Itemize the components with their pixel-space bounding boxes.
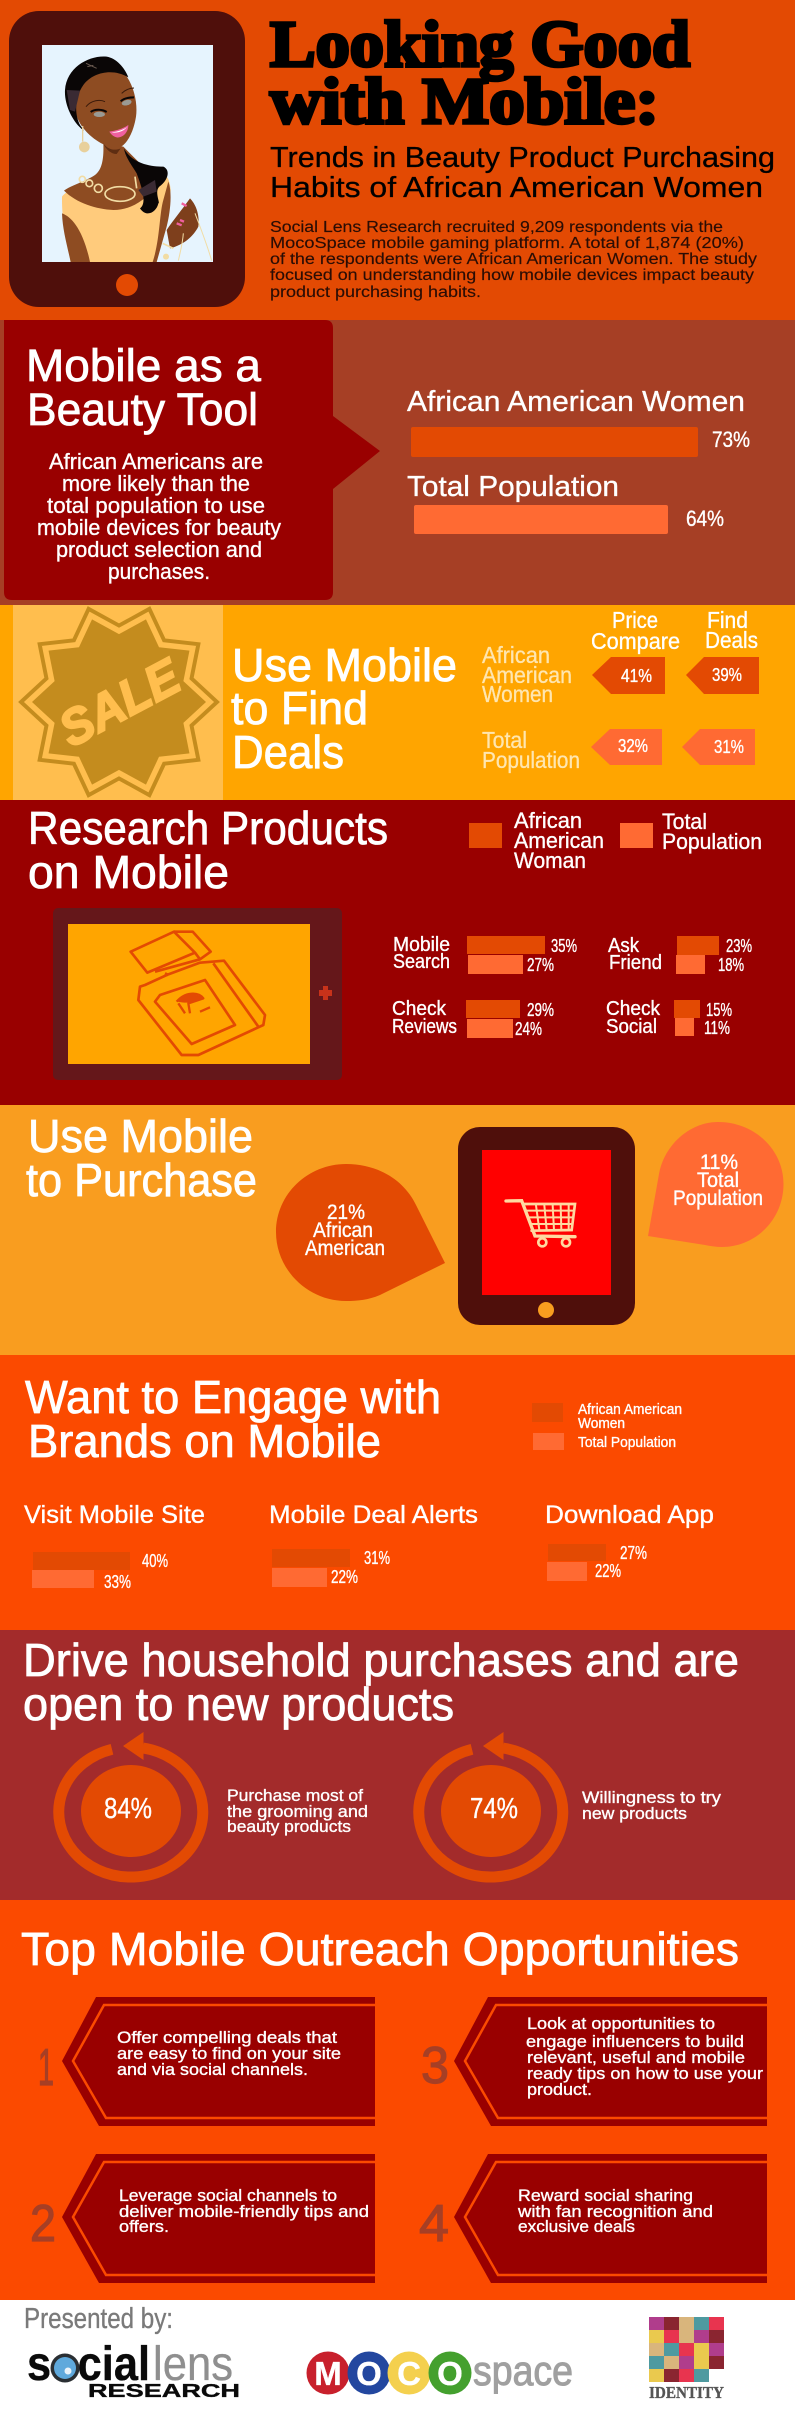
stat ring: 74%: [419, 1732, 563, 1877]
bar chart: African American Women 73%: 73%: [712, 427, 750, 452]
stat caption: 84%: Purchase most of: [227, 1786, 363, 1805]
title: [270, 8, 690, 138]
stat caption: 74%: new products: [582, 1804, 687, 1823]
bar chart: mobile deal alerts: Mobile Deal Alerts: [269, 1501, 478, 1529]
opportunity 1: Offer compelling deals that: [117, 2028, 337, 2047]
legend: [469, 808, 762, 873]
speech bubble: 21% African American: African: [313, 1219, 373, 1242]
heading: Deals: [232, 726, 344, 778]
tag: 31%: 31%: [714, 737, 744, 757]
legend: Woman: [514, 848, 586, 873]
opportunity 3: relevant, useful and mobile: [527, 2048, 745, 2067]
intro text: MocoSpace mobile gaming platform. A total of 1,874 (20%): [270, 235, 744, 252]
logo: social lens research: [27, 2338, 240, 2401]
opportunity 2: Leverage social channels to: [119, 2186, 337, 2205]
stat ring: 84%: 84%: [104, 1793, 152, 1825]
bar chart: check reviews: 24%: [515, 1019, 542, 1039]
heading: to Purchase: [26, 1154, 257, 1206]
intro text: Social Lens Research recruited 9,209 respondents via the: [270, 219, 723, 236]
heading: [28, 802, 388, 898]
opportunity 1: 1: [38, 2039, 54, 2097]
bar chart: mobile deal alerts: [269, 1501, 478, 1587]
panel: footer: [0, 2300, 795, 2410]
heading: Use Mobile: [28, 1110, 253, 1162]
body text: [37, 449, 281, 584]
icon: tablet with shopping cart: [458, 1127, 635, 1325]
callout box: [4, 320, 380, 600]
opportunity 3: [421, 1997, 767, 2126]
heading: [26, 1110, 257, 1206]
bar chart: ask friend: 23%: [726, 936, 752, 956]
opportunity 4: exclusive deals: [518, 2217, 635, 2236]
panel: drive household purchases: [0, 1630, 795, 1900]
tag: 41%: [592, 657, 665, 694]
logo: social lens research: RESEARCH: [88, 2381, 240, 2401]
tag: 41%: 41%: [621, 666, 652, 686]
bar chart: check reviews: [392, 998, 554, 1039]
logo: mocospace: space: [473, 2347, 573, 2394]
heading: Beauty Tool: [27, 384, 258, 435]
icon: tablet with perfume bottle: [53, 908, 342, 1080]
subtitle: [270, 142, 775, 204]
heading: Drive household purchases and are: [23, 1634, 739, 1686]
body text: purchases.: [108, 559, 210, 584]
opportunity 3: 3: [421, 2037, 449, 2095]
bar chart: download app: 22%: [595, 1561, 621, 1581]
legend: African American: [578, 1402, 682, 1418]
logo: mocospace: [306, 2347, 573, 2394]
bar chart: Total Population 64%: [407, 471, 724, 534]
stat caption: 84%: [227, 1786, 368, 1836]
speech bubble: 11% Total Population: [648, 1122, 784, 1247]
heading: Want to Engage with: [25, 1371, 441, 1423]
bar chart: check reviews: Reviews: [392, 1016, 457, 1038]
opportunity 4: Reward social sharing: [518, 2186, 693, 2205]
column labels: Deals: [705, 627, 758, 653]
opportunity 3: ready tips on how to use your: [527, 2064, 763, 2083]
heading: Brands on Mobile: [28, 1415, 381, 1467]
heading: [231, 639, 457, 778]
row labels: Women: [482, 681, 553, 707]
tag: 32%: [591, 729, 662, 765]
body text: more likely than the: [62, 471, 250, 496]
speech bubble: 21% African American: American: [305, 1237, 385, 1260]
icon: sale badge: SALE: [50, 647, 191, 758]
stat caption: 74%: Willingness to try: [582, 1788, 722, 1807]
legend: American: [514, 828, 604, 853]
body text: total population to use: [47, 493, 265, 518]
bar chart: visit mobile site: 40%: [142, 1551, 168, 1571]
bar chart: download app: [545, 1501, 714, 1581]
heading: Mobile as a: [26, 340, 262, 391]
bar chart: ask friend: Friend: [609, 952, 662, 974]
bar chart: check social: 11%: [704, 1018, 730, 1038]
bar chart: ask friend: 18%: [718, 955, 744, 975]
logo: identity: IDENTITY: [649, 2383, 724, 2402]
row labels: Population: [482, 747, 580, 773]
column labels: Find: [707, 607, 748, 633]
subtitle: Trends in Beauty Product Purchasing: [270, 142, 775, 174]
bar chart: ask friend: [608, 935, 752, 975]
bar chart: African American Women 73%: African American Women: [407, 386, 745, 418]
column labels: [591, 607, 758, 654]
opportunity 4: [419, 2154, 767, 2283]
intro text: product purchasing habits.: [270, 284, 481, 301]
bar chart: download app: Download App: [545, 1501, 714, 1529]
stat caption: 74%: [582, 1788, 722, 1823]
stat ring: 74%: 74%: [470, 1793, 518, 1825]
icon: sale badge: [21, 609, 217, 795]
logo: social lens research: social: [27, 2338, 150, 2391]
speech bubble: 11% Total Population: Total: [697, 1169, 739, 1192]
panel: use mobile to purchase: [0, 1105, 795, 1355]
bar chart: check social: Check: [606, 998, 661, 1020]
speech bubble: 11% Total Population: Population: [673, 1187, 763, 1210]
body text: mobile devices for beauty: [37, 515, 281, 540]
title: with Mobile:: [270, 65, 659, 138]
heading: Use Mobile: [232, 639, 457, 691]
bar chart: check social: [606, 998, 732, 1038]
intro text: focused on understanding how mobile devices impact beauty: [270, 267, 754, 284]
logo: identity: [649, 2317, 724, 2402]
opportunity 3: Look at opportunities to: [527, 2014, 715, 2033]
logo: mocospace: C: [397, 2355, 421, 2392]
subtitle: Habits of African American Women: [270, 172, 763, 204]
bar chart: Total Population 64%: Total Population: [407, 471, 619, 503]
bar chart: mobile deal alerts: 31%: [364, 1548, 390, 1568]
logo: mocospace: O: [437, 2355, 463, 2392]
bar chart: visit mobile site: 33%: [104, 1572, 131, 1592]
legend: Women: [578, 1416, 625, 1432]
bar chart: Total Population 64%: 64%: [686, 506, 724, 531]
opportunity 2: 2: [30, 2195, 56, 2253]
bar chart: mobile search: 27%: [527, 955, 554, 975]
opportunity 1: and via social channels.: [117, 2060, 308, 2079]
opportunity 2: offers.: [119, 2217, 169, 2236]
bar chart: check social: Social: [606, 1016, 657, 1038]
opportunity 1: are easy to find on your site: [117, 2044, 341, 2063]
column labels: Price: [612, 607, 658, 633]
heading: [26, 340, 262, 435]
logo: mocospace: O: [356, 2355, 382, 2392]
logo: social lens research: lens: [153, 2338, 233, 2391]
presented by: Presented by:: [24, 2303, 173, 2335]
bar chart: mobile search: [393, 934, 577, 975]
bar chart: check social: 15%: [706, 1000, 732, 1020]
heading: to Find: [231, 682, 368, 734]
bar chart: visit mobile site: Visit Mobile Site: [24, 1501, 205, 1529]
bar chart: mobile search: 35%: [551, 936, 577, 956]
body text: product selection and: [56, 537, 262, 562]
heading: on Mobile: [28, 846, 229, 898]
intro text: [270, 219, 757, 301]
title: Looking Good: [270, 8, 690, 81]
logo: mocospace: M: [314, 2355, 342, 2392]
heading: Research Products: [28, 802, 388, 854]
opportunity 2: [30, 2154, 375, 2283]
opportunity 1: [38, 1997, 375, 2126]
row labels: American: [482, 662, 572, 688]
icon: tablet with illustrated woman: [9, 11, 245, 307]
panel: mobile as a beauty tool: [0, 320, 795, 605]
bar chart: visit mobile site: [24, 1501, 205, 1592]
legend: Total: [662, 809, 707, 834]
heading: [23, 1634, 739, 1730]
opportunity 4: 4: [419, 2195, 449, 2253]
bar chart: check reviews: Check: [392, 998, 447, 1020]
tag: 39%: [686, 657, 759, 694]
bar chart: ask friend: Ask: [608, 935, 640, 957]
tag: 39%: 39%: [712, 665, 742, 685]
stat caption: 84%: the grooming and: [227, 1802, 368, 1821]
legend: Total Population: [578, 1435, 676, 1451]
column labels: Compare: [591, 628, 680, 654]
panel: research products on mobile: [0, 800, 795, 1105]
legend: African: [514, 808, 582, 833]
bar chart: African American Women 73%: [407, 386, 750, 457]
panel: use mobile to find deals: [0, 605, 795, 800]
heading: open to new products: [23, 1678, 454, 1730]
bar chart: mobile deal alerts: 22%: [331, 1567, 358, 1587]
opportunity 2: deliver mobile-friendly tips and: [119, 2202, 369, 2221]
stat caption: 84%: beauty products: [227, 1817, 351, 1836]
opportunity 3: engage influencers to build: [526, 2032, 744, 2051]
row labels: African: [482, 642, 550, 668]
row labels: [482, 642, 580, 773]
body text: African Americans are: [49, 449, 263, 474]
heading: Top Mobile Outreach Opportunities: [21, 1923, 739, 1975]
panel: want to engage with brands on mobile: [0, 1355, 795, 1631]
heading: [25, 1371, 441, 1467]
bar chart: download app: 27%: [620, 1543, 647, 1563]
tag: 32%: 32%: [618, 736, 648, 756]
legend: Population: [662, 829, 762, 854]
intro text: of the respondents were African American Women. The study: [270, 251, 757, 268]
panel: header: [0, 0, 795, 320]
tag: 31%: [682, 729, 755, 765]
stat ring: 84%: [59, 1732, 203, 1877]
speech bubble: 21% African American: 21%: [327, 1201, 365, 1224]
bar chart: mobile search: Mobile: [393, 934, 450, 956]
opportunity 4: with fan recognition and: [517, 2202, 713, 2221]
bar chart: check reviews: 29%: [527, 1000, 554, 1020]
panel: top mobile outreach opportunities: [0, 1900, 795, 2300]
legend: [532, 1402, 682, 1451]
speech bubble: 21% African American: [276, 1164, 445, 1301]
opportunity 3: product.: [527, 2080, 592, 2099]
row labels: Total: [482, 727, 527, 753]
speech bubble: 11% Total Population: 11%: [700, 1151, 738, 1174]
bar chart: mobile search: Search: [393, 951, 450, 973]
